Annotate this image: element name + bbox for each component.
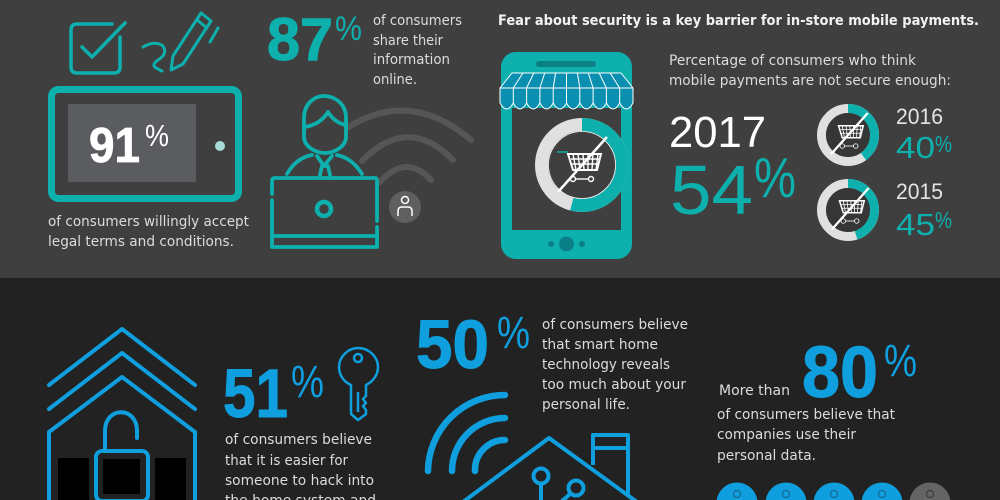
chart: 2015 donut 45 percent [822, 184, 874, 236]
stat: 2017 54 percent: 2017 [669, 108, 766, 157]
text: percentage intro: Percentage of consumers who think [669, 53, 917, 69]
stat: 2017 54 percent [669, 108, 796, 229]
text: terms and conditions: legal terms and conditions. [48, 234, 234, 250]
text: smart home reveals: technology reveals [542, 357, 670, 373]
text: share information online: of consumers [373, 13, 462, 29]
text: companies use data: companies use their [717, 427, 856, 443]
text: share information online: online. [373, 72, 417, 88]
stat: 2016 40 percent: % [935, 131, 952, 157]
text: hack into home system: of consumers believe [225, 432, 372, 448]
text: hack into home system: someone to hack into [225, 473, 374, 489]
stat: 51 percent: % [291, 356, 324, 407]
chart: 2016 donut 40 percent [822, 108, 874, 162]
stat: 2016 40 percent: 40 [896, 130, 935, 165]
icon: phone with storefront [500, 52, 633, 259]
stat: 87 percent: % [335, 10, 362, 48]
text: smart home reveals: of consumers believe [542, 317, 688, 333]
icon: person at laptop [272, 96, 377, 247]
stat: 2015 45 percent: % [935, 207, 952, 233]
text: companies use data: personal data. [717, 448, 816, 464]
text: hack into home system: that it is easier for [225, 453, 348, 469]
stat: 50 percent [416, 306, 530, 383]
stat: more than 80 percent [719, 333, 917, 413]
stat: 50 percent: 50 [416, 306, 489, 383]
text: hack into home system [225, 432, 376, 500]
icon: house with open padlock [49, 329, 195, 500]
icon row: people four of five [716, 482, 950, 500]
panel: bottom section background [0, 278, 1000, 500]
stat: 2017 54 percent: % [754, 146, 796, 210]
icon: tablet with 91 percent: % [145, 118, 169, 153]
icon: pen and signature [143, 13, 218, 71]
icon: checkbox [71, 23, 125, 73]
text: share information online: information [373, 52, 450, 68]
chart: 2017 donut 54 percent [542, 124, 622, 206]
icon: key [339, 348, 378, 420]
text: percentage intro: mobile payments are not secure enough: [669, 73, 951, 89]
icon: awning [500, 73, 633, 109]
stat: 87 percent: 87 [267, 6, 333, 73]
text: smart home reveals: that smart home [542, 337, 658, 353]
stat: more than 80 percent: 80 [802, 333, 878, 413]
text: share information online: share their [373, 33, 443, 49]
stat: 2017 54 percent: 54 [670, 151, 753, 229]
text: companies use data [717, 407, 895, 464]
icon: user badge [389, 191, 421, 223]
text: smart home reveals [542, 317, 688, 413]
icon: tablet with 91 percent: 91 [89, 119, 140, 173]
stat: 50 percent: % [497, 307, 530, 358]
stat: more than 80 percent: More than [719, 383, 790, 399]
stat: 51 percent: 51 [223, 355, 288, 432]
text: percentage intro [669, 53, 951, 89]
text: terms and conditions: of consumers willingly accept [48, 214, 249, 230]
text: terms and conditions [48, 214, 249, 250]
panel: top section background [0, 0, 1000, 278]
text: smart home reveals: too much about your [542, 377, 686, 393]
stat: more than 80 percent: % [884, 335, 917, 386]
text: smart home reveals: personal life. [542, 397, 630, 413]
text: share information online [373, 13, 462, 88]
icon: crossed-out cart [557, 137, 607, 192]
stat: 2015 45 percent [896, 179, 952, 242]
stat: 2015 45 percent: 45 [896, 207, 935, 242]
text: companies use data: of consumers believe that [717, 407, 895, 423]
stat: 2015 45 percent: 2015 [896, 179, 943, 204]
icon: blue wifi arcs [428, 395, 505, 471]
stat: 2016 40 percent [896, 104, 952, 165]
icon: wifi signal grey [347, 111, 471, 182]
stat: 2016 40 percent: 2016 [896, 104, 943, 129]
icon: tablet with 91 percent [52, 90, 238, 198]
icon: smart house with circuit [463, 435, 637, 500]
